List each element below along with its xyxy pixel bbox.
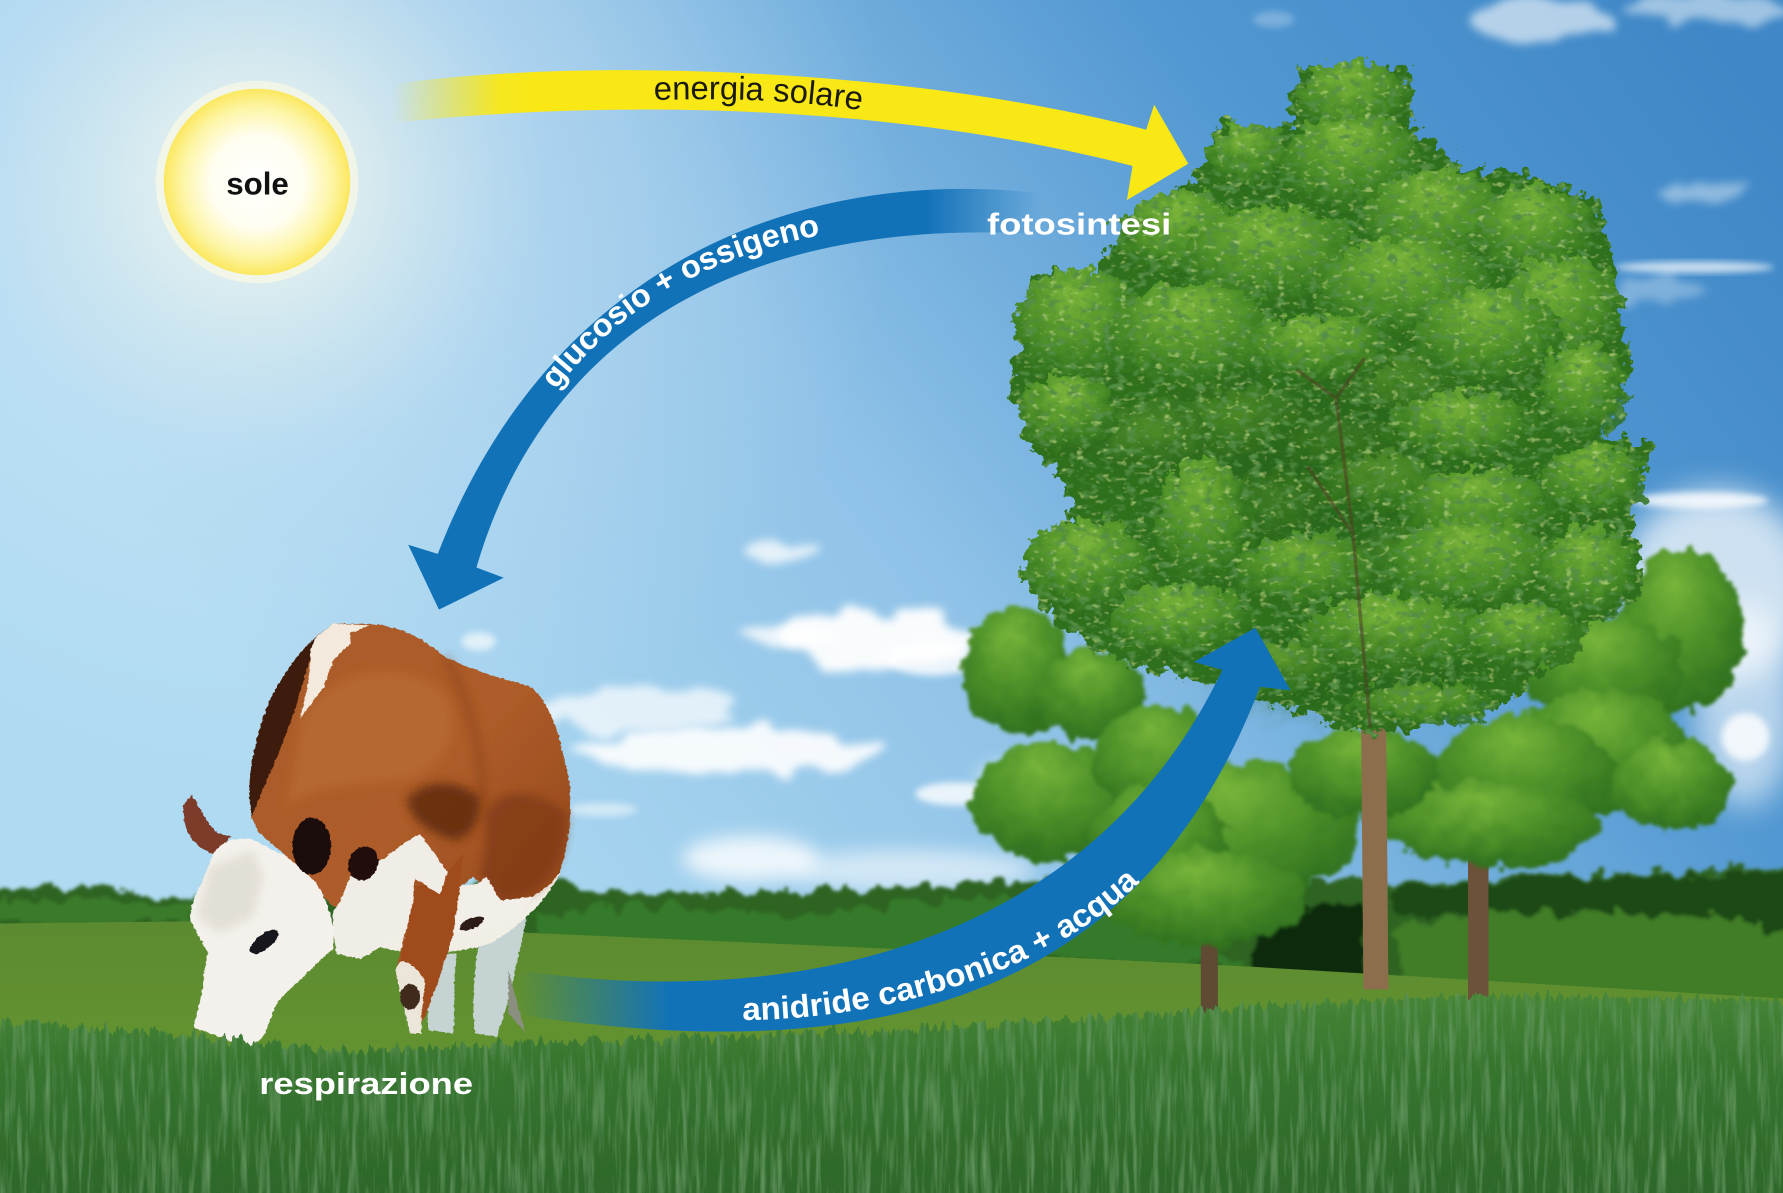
arrow: glucose and oxygen [408, 188, 1030, 610]
head [190, 839, 334, 1049]
dark flank shading [480, 793, 567, 905]
yellow arrow shape [392, 70, 1188, 200]
lens flare [1722, 713, 1769, 761]
trunk [1468, 853, 1488, 1012]
label: fotosintesi: fotosintesi [987, 206, 1171, 241]
label: respirazione: respirazione [259, 1066, 473, 1101]
shoulder shadow [407, 783, 480, 840]
white withers patch [300, 623, 369, 718]
white belly [380, 873, 560, 953]
highlight on flank [287, 670, 454, 807]
main trunk [1361, 728, 1388, 989]
meadow field [0, 921, 1783, 1092]
white chest patch [453, 877, 533, 937]
label: sole: sole [226, 166, 289, 201]
brown body [249, 623, 570, 1014]
sun disc [164, 89, 350, 275]
dark neck strip [249, 637, 317, 817]
blue arrow shape [517, 628, 1291, 1032]
sun halo [156, 81, 358, 283]
foreground grass [0, 995, 1783, 1193]
branches [1296, 358, 1370, 728]
front leg [397, 853, 463, 1034]
distant tree line [0, 867, 1783, 1006]
blue arrow shape [408, 189, 1040, 610]
tail [508, 970, 525, 1032]
trunk [1201, 921, 1218, 1014]
muscle line shading [445, 657, 483, 800]
main tree [1010, 61, 1651, 989]
foliage [1291, 549, 1743, 868]
eye [246, 925, 282, 958]
label: glucosio + ossigeno: glucosio + ossigeno [546, 220, 818, 390]
neck dark spot [343, 842, 384, 885]
head shading [197, 850, 263, 933]
white neck [333, 833, 447, 959]
arrow: solar energy [396, 70, 1188, 200]
ear [183, 795, 232, 854]
back left tree [963, 608, 1359, 1014]
rear and far legs [428, 917, 527, 1037]
label: energia solare: energia solare [655, 76, 862, 110]
label: anidride carbonica + acqua: anidride carbonica + acqua [743, 874, 1140, 1020]
cow [183, 623, 570, 1049]
foliage [963, 608, 1359, 946]
sun [156, 81, 358, 283]
arrow: carbon dioxide and water [526, 628, 1290, 1032]
right ear [292, 818, 331, 874]
canopy [1010, 61, 1651, 734]
back right tree [1291, 549, 1743, 1012]
clouds [462, 0, 1783, 890]
